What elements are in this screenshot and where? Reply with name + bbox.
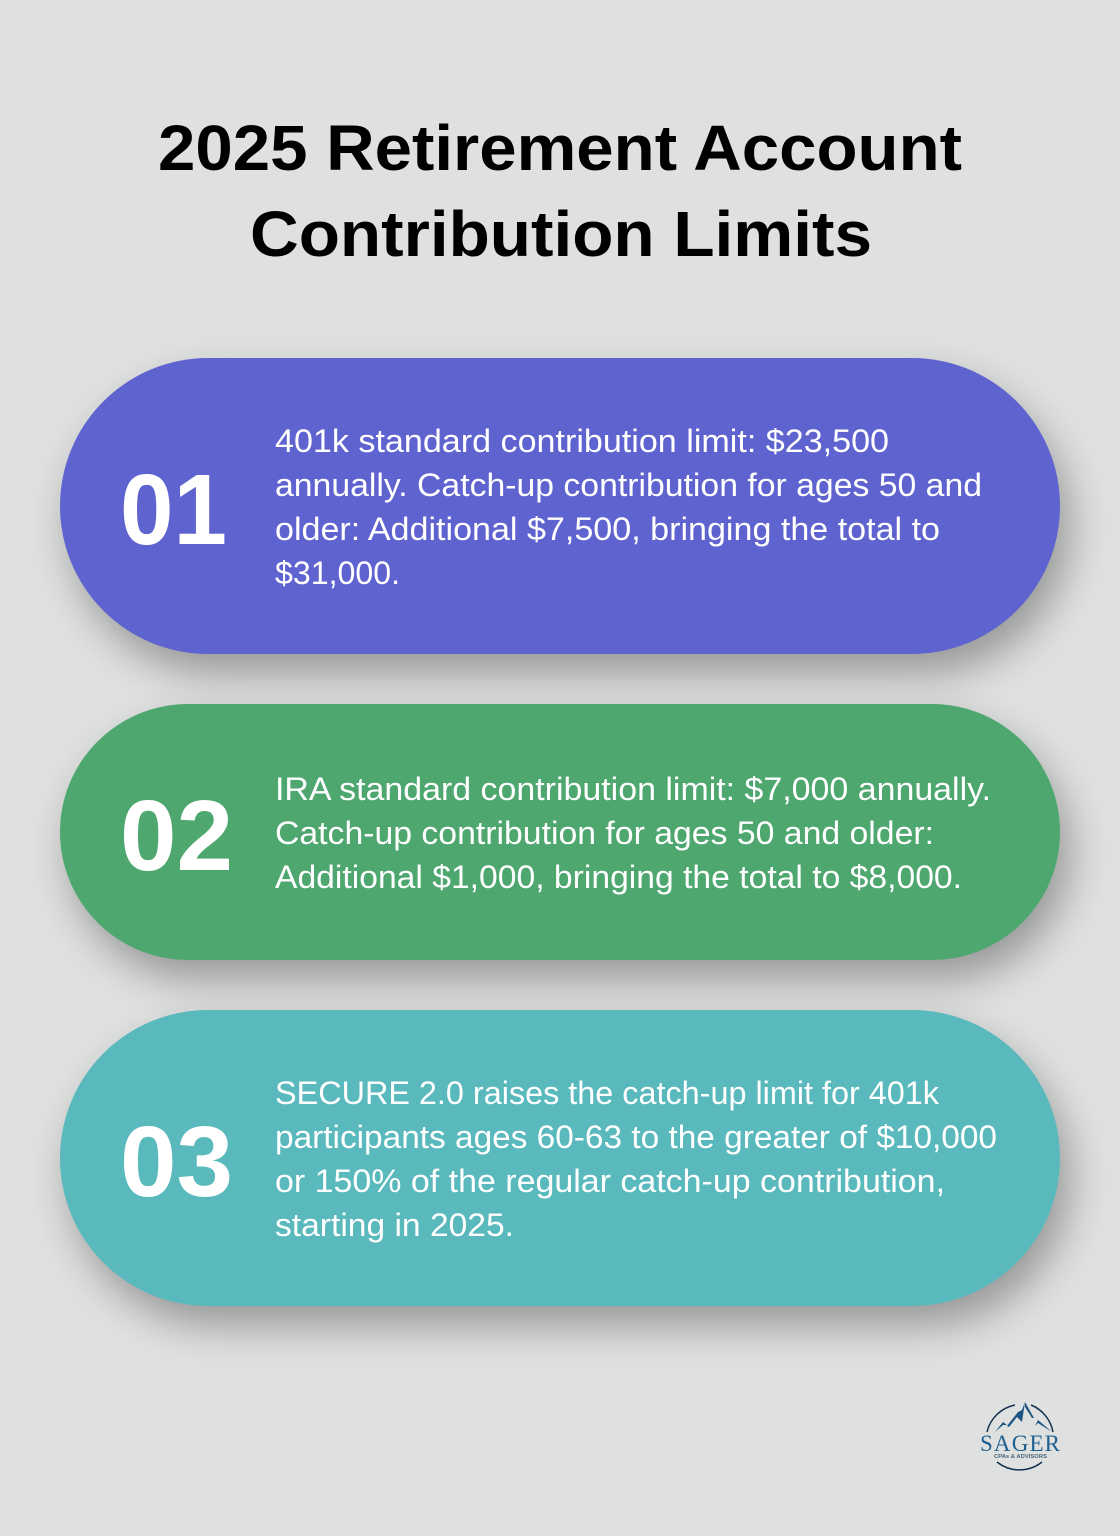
logo: Sager CPAs & Advisors [980,1402,1061,1470]
number 02: 02 [120,780,233,892]
text block: 401k limits: annually. Catch-up contribution for ages 50 and [275,467,982,503]
text block: IRA limits [275,771,991,895]
text block: IRA limits: Additional $1,000, bringing the total to $8,000. [275,859,962,895]
text block: IRA limits: IRA standard contribution limit: $7,000 annually. [275,771,991,807]
text block: SECURE 2.0: or 150% of the regular catch-up contribution, [275,1163,945,1199]
card background: 03 teal pill [60,1010,1060,1306]
icon: circle arcs [987,1405,1053,1470]
logo tagline: CPAs & ADVISORS [994,1454,1047,1460]
number 01: 01 [120,454,227,566]
logo wordmark: SAGER [980,1431,1061,1456]
title [158,112,962,270]
card background: 01 purple pill [60,358,1060,654]
text block: SECURE 2.0: SECURE 2.0 raises the catch-up limit for 401k [275,1075,940,1111]
text block: IRA limits: Catch-up contribution for ages 50 and older: [275,815,934,851]
text block: 401k limits: older: Additional $7,500, bringing the total to [275,511,940,547]
text block: SECURE 2.0: participants ages 60-63 to the greater of $10,000 [275,1119,997,1155]
icon: mountains [995,1402,1052,1432]
title: 2025 Retirement Account [158,112,962,184]
text block: SECURE 2.0: starting in 2025. [275,1207,514,1243]
card background: 02 green pill [60,704,1060,960]
number 03: 03 [120,1106,233,1218]
text block: SECURE 2.0 [275,1075,997,1243]
text block: 401k limits [275,423,982,591]
title: Contribution Limits [250,198,872,270]
text block: 401k limits: $31,000. [275,555,400,591]
text block: 401k limits: 401k standard contribution limit: $23,500 [275,423,889,459]
